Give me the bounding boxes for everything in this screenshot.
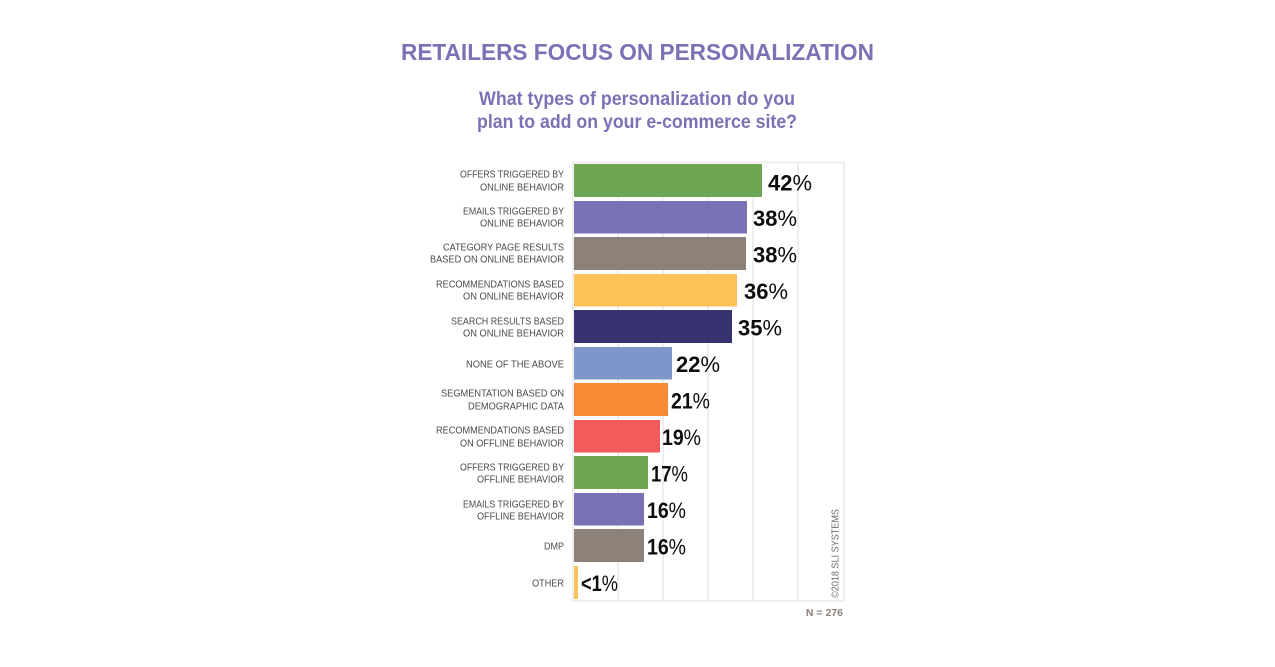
bar: segmentation 21%: 21% xyxy=(671,388,710,414)
category labels: ONLINE BEHAVIOR xyxy=(480,218,564,229)
bar: category page results 38% xyxy=(574,237,797,270)
bar: emails triggered by online behavior 38% xyxy=(574,201,797,234)
bar: recommendations online 36%: 36% xyxy=(744,279,788,304)
category labels: DEMOGRAPHIC DATA xyxy=(468,401,564,412)
copyright note: ©2018 SLI SYSTEMS xyxy=(830,509,842,598)
category labels: OFFLINE BEHAVIOR xyxy=(477,474,564,485)
bar chart xyxy=(573,162,844,601)
bar: search results 35% xyxy=(574,310,782,343)
category labels: OFFLINE BEHAVIOR xyxy=(477,511,564,522)
category labels: EMAILS TRIGGERED BY xyxy=(463,206,564,217)
category labels: ON ONLINE BEHAVIOR xyxy=(463,291,564,302)
bar: recommendations offline 19%: 19% xyxy=(662,425,701,450)
category labels: ON ONLINE BEHAVIOR xyxy=(463,328,564,339)
bar: DMP 16% xyxy=(574,529,686,562)
chart grid frame xyxy=(573,162,844,601)
category labels: OTHER xyxy=(532,578,564,589)
bar: segmentation 21% xyxy=(574,383,710,416)
category labels: RECOMMENDATIONS BASED xyxy=(436,425,564,436)
subtitle: What types of personalization do you xyxy=(479,89,795,110)
bar: offers triggered by online behavior 42% xyxy=(574,164,812,197)
bar: offers offline 17%: 17% xyxy=(651,462,688,486)
bar: none of the above 22% xyxy=(574,347,720,380)
category labels: ON OFFLINE BEHAVIOR xyxy=(460,438,564,449)
sample size note: N = 276 xyxy=(806,607,843,619)
category labels: SEGMENTATION BASED ON xyxy=(441,388,564,399)
category labels: CATEGORY PAGE RESULTS xyxy=(443,242,564,253)
bar: recommendations online 36% xyxy=(574,274,788,306)
category labels xyxy=(430,169,564,589)
category labels: OFFERS TRIGGERED BY xyxy=(460,462,564,473)
bar: offers offline 17% xyxy=(574,456,688,489)
bar: emails triggered by online behavior 38%: 38% xyxy=(753,206,797,231)
category labels: NONE OF THE ABOVE xyxy=(466,359,564,370)
bar: other under 1%: <1% xyxy=(581,571,618,596)
bar: category page results 38%: 38% xyxy=(753,242,797,268)
bar: emails offline 16%: 16% xyxy=(647,498,686,523)
category labels: ONLINE BEHAVIOR xyxy=(480,182,564,193)
title: RETAILERS FOCUS ON PERSONALIZATION xyxy=(401,39,874,65)
bar: none of the above 22%: 22% xyxy=(676,352,720,377)
category labels: EMAILS TRIGGERED BY xyxy=(463,499,564,510)
subtitle: plan to add on your e-commerce site? xyxy=(477,112,797,133)
bar: DMP 16%: 16% xyxy=(647,534,686,560)
category labels: SEARCH RESULTS BASED xyxy=(451,316,564,327)
category labels: DMP xyxy=(544,541,564,552)
bar: emails offline 16% xyxy=(574,493,686,526)
bar: offers triggered by online behavior 42%: 42% xyxy=(768,170,812,196)
bar: recommendations offline 19% xyxy=(574,420,701,452)
subtitle xyxy=(477,89,797,133)
bar: other under 1% xyxy=(574,566,618,599)
bar: search results 35%: 35% xyxy=(738,316,782,340)
category labels: BASED ON ONLINE BEHAVIOR xyxy=(430,254,564,265)
category labels: OFFERS TRIGGERED BY xyxy=(460,169,564,180)
category labels: RECOMMENDATIONS BASED xyxy=(436,279,564,290)
